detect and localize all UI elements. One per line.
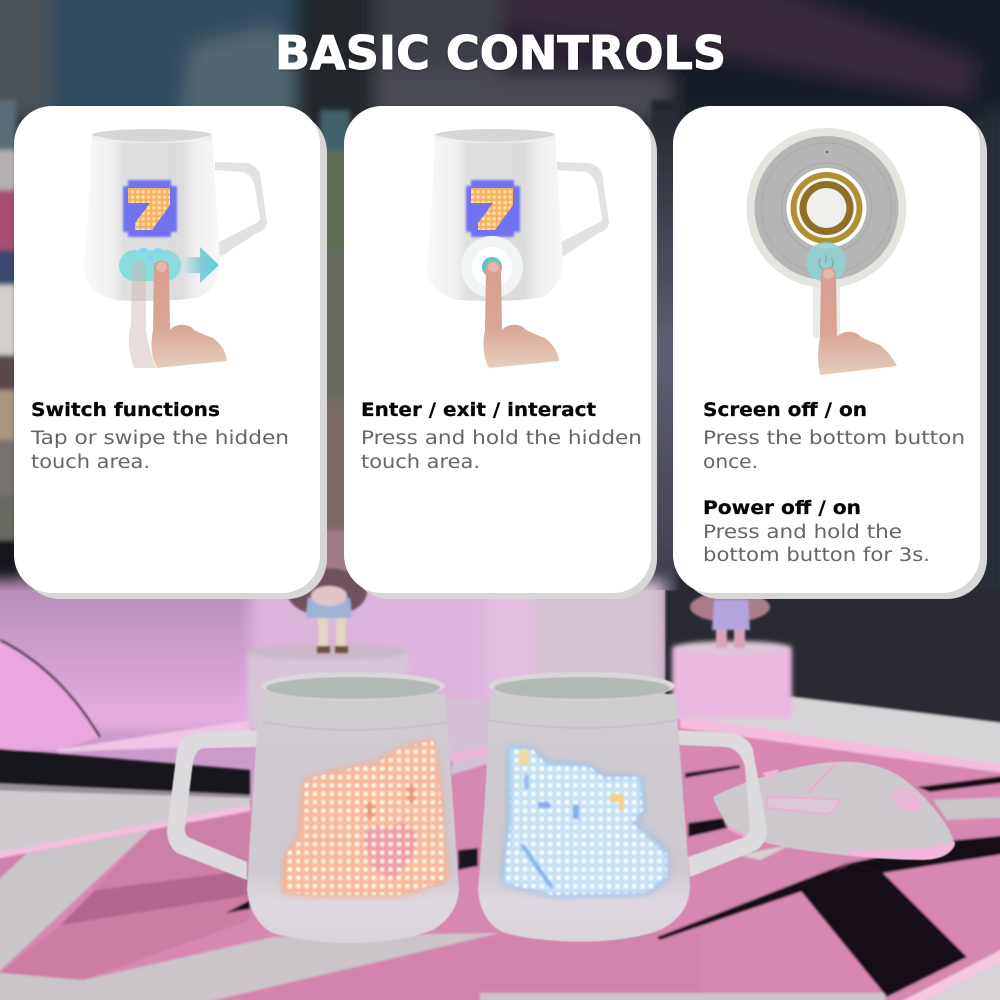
heading: screen off on: Screen off / on — [703, 399, 867, 421]
right mug with blue LED pixel art — [478, 672, 767, 942]
description: screen: Press the bottom button — [703, 428, 965, 449]
icon: white mug with handle — [83, 129, 267, 301]
icon: pointing finger hand — [818, 268, 897, 375]
heading: power off on: Power off / on — [703, 497, 861, 519]
mat base — [0, 718, 1000, 1000]
description — [30, 428, 289, 473]
panel: switch functions — [14, 106, 327, 599]
icon: white mug with handle — [426, 129, 609, 301]
touch area pill — [119, 248, 181, 281]
press indicator ring — [461, 236, 523, 298]
icon: LED number seven display — [123, 180, 177, 237]
description: power: bottom button for 3s. — [703, 545, 930, 566]
black stripes on mat — [800, 863, 967, 997]
icon: power button highlight — [806, 242, 846, 282]
description: Tap or swipe the hidden — [30, 428, 289, 449]
icon: mug base with gold button — [746, 128, 906, 338]
icon: pink gaming mouse — [713, 762, 955, 860]
description: touch area. — [361, 452, 480, 473]
icon: LED number seven display — [466, 180, 520, 237]
title: BASIC CONTROLS — [275, 26, 726, 80]
description — [361, 428, 642, 473]
panel: power and screen — [673, 106, 987, 599]
display stands and figurines — [248, 641, 792, 730]
lower scene is softly out of focus — [0, 580, 1000, 1000]
icon: pointing finger hand — [152, 260, 227, 368]
description: screen — [703, 428, 965, 473]
heading: switch functions: Switch functions — [31, 399, 220, 421]
orange cat LED image — [283, 740, 449, 898]
icon: pointing finger hand — [484, 260, 559, 368]
description: power — [703, 522, 930, 566]
icon: swipe arrow — [183, 247, 219, 283]
description: screen: once. — [703, 452, 758, 473]
lower scene backing — [0, 590, 665, 1000]
icon: faded finger ghost — [129, 260, 156, 368]
left mug with orange LED pixel art — [167, 672, 459, 943]
description: power: Press and hold the — [703, 522, 902, 543]
blue cat LED image — [498, 743, 674, 898]
heading: enter exit interact: Enter / exit / interact — [361, 399, 596, 421]
panel: enter exit interact — [344, 106, 657, 599]
description: Press and hold the hidden — [361, 428, 642, 449]
description: touch area. — [31, 452, 150, 473]
